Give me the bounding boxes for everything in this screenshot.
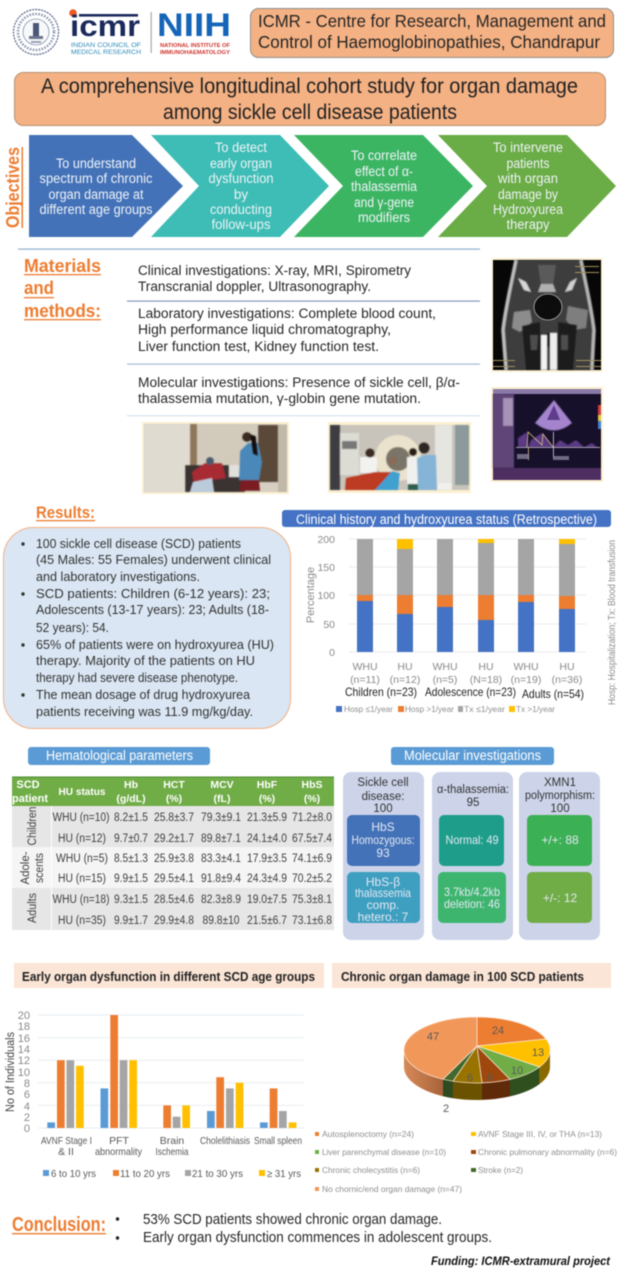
chart legend: Hosp ≤1/year bbox=[344, 704, 393, 714]
table rows: HU (n=35) bbox=[58, 915, 106, 927]
table header: SCD bbox=[16, 779, 40, 791]
pie value labels: 47 bbox=[427, 1031, 439, 1043]
bullet list bbox=[21, 536, 274, 719]
box: HbS homozygous bbox=[347, 815, 420, 866]
chart legend: ≥ 31 yrs bbox=[267, 1168, 301, 1180]
text block: laboratory investigations: High performance liquid chromatography, bbox=[138, 322, 391, 337]
bullet list: The mean dosage of drug hydroxyurea bbox=[36, 687, 251, 702]
heading: early organ dysfunction: Early organ dysfunction in different SCD age groups bbox=[22, 969, 315, 984]
bullet list: and laboratory investigations. bbox=[36, 569, 200, 584]
category labels: abnormality bbox=[95, 1146, 143, 1158]
category labels: & II bbox=[58, 1146, 74, 1158]
chart legend: 11 to 20 yrs bbox=[120, 1168, 170, 1180]
table rows: 21.5±6.7 bbox=[247, 915, 287, 927]
panel: sickle cell disease bbox=[343, 772, 424, 940]
objective arrow 4: damage by bbox=[498, 187, 558, 202]
category labels: HU bbox=[559, 661, 575, 673]
pie value labels: 6 bbox=[467, 1072, 473, 1084]
chart legend bbox=[336, 704, 555, 714]
conclusion text: Early organ dysfunction commences in adolescent groups. bbox=[143, 1229, 492, 1246]
heading: molecular investigations: Molecular investigations bbox=[404, 748, 541, 763]
heading: Materials and methods: Materials bbox=[24, 256, 101, 276]
box: HbS-beta thalassemia: HbS-β bbox=[366, 875, 400, 889]
panel: sickle cell disease: Sickle cell bbox=[357, 777, 409, 789]
image: MRI scan bbox=[492, 258, 602, 372]
category labels: HU bbox=[478, 661, 494, 673]
table rows: 9.7±0.7 bbox=[114, 833, 148, 845]
category labels: (n=36) bbox=[552, 674, 582, 686]
table rows: WHU (n=10) bbox=[52, 812, 110, 824]
age group labels: Adults (n=54) bbox=[522, 687, 584, 701]
category labels: (n=5) bbox=[433, 674, 457, 686]
table rows: 91.8±9.4 bbox=[201, 873, 242, 885]
text block: laboratory investigations: Laboratory investigations: Complete blood count, bbox=[138, 306, 436, 321]
age group labels: Children (n=23) bbox=[345, 685, 417, 699]
pie legend: Autosplenoctomy (n=24) bbox=[322, 1129, 414, 1139]
title box: A comprehensive longitudinal cohort study for organ damage bbox=[41, 75, 578, 98]
y axis: 4 bbox=[24, 1101, 30, 1113]
table rows: 79.3±9.1 bbox=[201, 812, 241, 824]
box: normal: Normal: 49 bbox=[446, 833, 499, 847]
table rows: 82.3±8.9 bbox=[201, 894, 241, 906]
table rows: 29.5±4.1 bbox=[154, 873, 194, 885]
y axis: 2 bbox=[24, 1112, 30, 1124]
heading: clinical history: Clinical history and hydroxyurea status (Retrospective) bbox=[296, 512, 597, 527]
bullet list: SCD patients: Children (6-12 years): 23; bbox=[36, 586, 270, 601]
box: deletion: 3.7kb/4.2kb bbox=[444, 885, 500, 899]
box: +/- bbox=[527, 872, 592, 923]
table rows: 24.1±4.0 bbox=[247, 833, 287, 845]
objective arrow 4: patients bbox=[506, 156, 550, 171]
y axis: 16 bbox=[18, 1033, 30, 1045]
category labels: Cholelithiasis bbox=[200, 1135, 250, 1147]
heading: chronic organ damage: Chronic organ damage in 100 SCD patients bbox=[341, 969, 584, 984]
row group labels: Adults bbox=[27, 893, 39, 923]
table header: (%) bbox=[166, 793, 182, 805]
table rows: 71.2±8.0 bbox=[292, 812, 332, 824]
category labels bbox=[41, 1135, 302, 1158]
objective arrow 2: by bbox=[234, 187, 248, 202]
logo: ICMR bbox=[69, 9, 141, 56]
text block: clinical investigations: Transcranial doppler, Ultrasonography. bbox=[138, 279, 371, 294]
y axis: 8 bbox=[24, 1078, 30, 1090]
table header: (%) bbox=[304, 793, 320, 805]
table rows: 75.3±8.1 bbox=[292, 894, 332, 906]
header box: centre name bbox=[250, 8, 614, 58]
bars bbox=[47, 1015, 296, 1128]
pie legend: No chornic/end organ damage (n=47) bbox=[322, 1184, 462, 1194]
category labels: AVNF Stage I bbox=[41, 1135, 92, 1147]
panel: alpha thalassemia: 95 bbox=[467, 797, 479, 809]
y axis labels: 50 bbox=[323, 619, 335, 631]
pie top slices bbox=[404, 1017, 550, 1083]
category labels: Ischemia bbox=[156, 1146, 189, 1158]
panel: XMN1 polymorphism: 100 bbox=[550, 803, 570, 815]
stacked bar chart: clinical history bbox=[305, 534, 586, 714]
table rows: 17.9±3.5 bbox=[247, 853, 287, 865]
box: +/+: +/+: 88 bbox=[541, 833, 579, 847]
panel: alpha thalassemia: α-thalassemia: bbox=[437, 784, 509, 796]
table rows bbox=[52, 812, 333, 927]
box: HbS-beta thalassemia bbox=[347, 872, 420, 924]
text block: molecular investigations bbox=[138, 375, 460, 406]
pie sides bbox=[404, 1050, 550, 1100]
heading: Materials and methods: and bbox=[24, 278, 54, 298]
category labels: (N=18) bbox=[470, 674, 502, 686]
funding note: Funding: ICMR-extramural project bbox=[431, 1256, 611, 1268]
bullet list: (45 Males: 55 Females) underwent clinical bbox=[36, 552, 271, 567]
objective arrow 4: To intervene bbox=[493, 140, 563, 155]
chart legend: Tx ≤1/year bbox=[464, 704, 505, 714]
chart legend: Hosp >1/year bbox=[405, 704, 454, 714]
panel: XMN1 polymorphism bbox=[519, 772, 600, 940]
objective arrow 3: and γ-gene bbox=[354, 195, 414, 210]
table rows: 9.9±1.7 bbox=[114, 915, 148, 927]
objective arrow 3: effect of α- bbox=[355, 164, 413, 179]
box: normal bbox=[439, 815, 504, 866]
header box: centre name: Control of Haemoglobinopathies, Chandrapur bbox=[258, 32, 600, 52]
table header: HU status bbox=[58, 786, 106, 798]
panel: results summary bbox=[4, 528, 290, 728]
table: hematological parameters bbox=[12, 776, 334, 930]
objective arrow 1 bbox=[29, 135, 183, 237]
text block: laboratory investigations bbox=[138, 306, 436, 354]
pie value labels: 2 bbox=[443, 1103, 449, 1115]
bullet list: 52 years): 54. bbox=[36, 620, 109, 635]
table rows: 29.9±4.8 bbox=[154, 915, 194, 927]
table rows: 8.2±1.5 bbox=[114, 812, 148, 824]
chart legend bbox=[43, 1168, 301, 1180]
table rows: 28.5±4.6 bbox=[154, 894, 194, 906]
bars bbox=[357, 539, 575, 652]
table rows: 74.1±6.9 bbox=[292, 853, 332, 865]
objective arrow 4: with organ bbox=[497, 171, 558, 186]
box: HbS homozygous: HbS bbox=[371, 820, 395, 834]
objective arrow 2: dysfunction bbox=[208, 171, 274, 186]
logo: ICMR: icmr bbox=[70, 10, 140, 43]
pie value labels bbox=[427, 1025, 544, 1115]
objective arrow 2: To detect bbox=[215, 140, 267, 155]
objective arrow 3: thalassemia bbox=[351, 179, 417, 194]
conclusion text bbox=[116, 1211, 492, 1246]
age group labels: Adolescence (n=23) bbox=[425, 685, 516, 699]
table rows: WHU (n=5) bbox=[56, 853, 108, 865]
table rows: WHU (n=18) bbox=[52, 894, 110, 906]
logo: NIIH: NATIONAL INSTITUTE OF bbox=[160, 43, 230, 49]
objective arrow 2 bbox=[151, 135, 329, 237]
category labels: Brain bbox=[160, 1135, 184, 1147]
age group labels bbox=[345, 685, 584, 701]
table header: (g/dL) bbox=[116, 793, 146, 805]
y axis: 10 bbox=[18, 1067, 30, 1079]
objective arrow 2: follow-ups bbox=[212, 217, 271, 232]
category labels: WHU bbox=[432, 661, 458, 673]
pie legend: Liver parenchymal disease (n=10) bbox=[322, 1147, 446, 1157]
box: HbS homozygous: 93 bbox=[376, 846, 390, 860]
bullet list: 100 sickle cell disease (SCD) patients bbox=[36, 536, 241, 551]
table header: Hb bbox=[124, 779, 138, 791]
table rows: 9.9±1.5 bbox=[114, 873, 148, 885]
title box: among sickle cell disease patients bbox=[163, 101, 457, 124]
box: HbS-beta thalassemia: hetero.: 7 bbox=[358, 910, 409, 924]
pie value labels: 6 bbox=[487, 1072, 493, 1084]
box: HbS homozygous: Homozygous: bbox=[352, 833, 414, 847]
image: echo doppler ultrasound bbox=[491, 387, 603, 482]
box: HbS-beta thalassemia: thalassemia bbox=[355, 886, 411, 900]
heading: Objectives: Objectives bbox=[3, 147, 23, 228]
table rows: 19.0±7.5 bbox=[247, 894, 287, 906]
text block: molecular investigations: thalassemia mutation, γ-globin gene mutation. bbox=[138, 391, 421, 406]
bullet list: therapy had severe disease phenotype. bbox=[36, 670, 238, 685]
y axis: 0 bbox=[24, 1123, 30, 1135]
y axis labels: Percentage bbox=[305, 567, 317, 623]
panel: sickle cell disease: disease: bbox=[362, 791, 404, 803]
objective arrow 1: different age groups bbox=[40, 202, 153, 217]
pie value labels: 24 bbox=[492, 1025, 504, 1037]
bullet list: 65% of patients were on hydroxyurea (HU) bbox=[36, 637, 274, 652]
category labels: (n=12) bbox=[390, 674, 420, 686]
pie legend: AVNF Stage III, IV, or THA (n=13) bbox=[478, 1129, 602, 1139]
y axis labels: 0 bbox=[329, 647, 335, 659]
objective arrow 1: spectrum of chronic bbox=[40, 171, 153, 186]
logo: national emblem seal bbox=[14, 10, 58, 54]
chart legend: 6 to 10 yrs bbox=[51, 1168, 96, 1180]
table rows: 70.2±5.2 bbox=[292, 873, 332, 885]
y axis: 14 bbox=[18, 1044, 30, 1056]
logo: NIIH bbox=[151, 7, 231, 56]
objective arrow 1: To understand bbox=[56, 156, 136, 171]
category labels: (n=11) bbox=[350, 674, 380, 686]
title box bbox=[14, 72, 606, 126]
pie chart: chronic organ damage bbox=[404, 1017, 550, 1115]
y axis: 12 bbox=[18, 1055, 30, 1067]
table rows: 67.5±7.4 bbox=[292, 833, 333, 845]
box: +/-: +/-: 12 bbox=[543, 891, 578, 905]
row group labels bbox=[20, 806, 46, 923]
heading: hematological parameters: Hematological parameters bbox=[46, 748, 193, 763]
logo: NIIH: NIIH bbox=[157, 7, 231, 43]
table header: HbF bbox=[257, 779, 278, 791]
text block: molecular investigations: Molecular investigations: Presence of sickle cell, β/α- bbox=[138, 375, 460, 390]
bullet list: patients receiving was 11.9 mg/kg/day. bbox=[36, 704, 253, 719]
table header: patient bbox=[12, 793, 48, 805]
note: abbreviations: Hosp: Hospitalization; Tx: Blood transfusion bbox=[606, 540, 618, 705]
heading: Materials and methods: methods: bbox=[24, 301, 101, 321]
category labels: Small spleen bbox=[254, 1135, 302, 1147]
bullet list: Adolescents (13-17 years): 23; Adults (18- bbox=[36, 602, 269, 617]
heading: chronic organ damage bbox=[332, 963, 611, 988]
category labels: HU bbox=[397, 661, 413, 673]
logo: ICMR: MEDICAL RESEARCH bbox=[71, 49, 141, 56]
row group labels: Adole- bbox=[20, 851, 32, 884]
table rows: 89.8±7.1 bbox=[201, 833, 241, 845]
y axis: No of Individuals bbox=[5, 1032, 17, 1112]
image: MRI scanner room photo bbox=[328, 422, 471, 493]
y axis: 18 bbox=[18, 1021, 30, 1033]
pie legend: Chronic pulmonary abnormality (n=6) bbox=[478, 1147, 617, 1157]
heading: Results: Results: bbox=[36, 503, 95, 522]
chart legend: 21 to 30 yrs bbox=[192, 1168, 243, 1180]
box: deletion: deletion: 46 bbox=[444, 897, 500, 911]
table rows: 9.3±1.5 bbox=[114, 894, 148, 906]
pie legend: Stroke (n=2) bbox=[478, 1165, 523, 1175]
pie legend: Chronic cholecystitis (n=6) bbox=[322, 1165, 420, 1175]
bullet list: therapy. Majority of the patients on HU bbox=[36, 653, 255, 668]
table header: MCV bbox=[210, 779, 234, 791]
box: HbS-beta thalassemia: comp. bbox=[367, 898, 399, 912]
y axis bbox=[5, 1010, 30, 1135]
table rows: HU (n=12) bbox=[58, 833, 106, 845]
table header bbox=[12, 779, 322, 805]
table rows: 89.8±10 bbox=[202, 915, 240, 927]
pie legend bbox=[315, 1129, 617, 1194]
objective arrow 3: modifiers bbox=[358, 210, 410, 225]
category labels: PFT bbox=[109, 1135, 129, 1147]
objective arrow 3: To correlate bbox=[351, 148, 417, 163]
table rows: 73.1±6.8 bbox=[292, 915, 332, 927]
category labels bbox=[350, 661, 582, 686]
text block: laboratory investigations: Liver function test, Kidney function test. bbox=[138, 339, 379, 354]
table rows: 25.9±3.8 bbox=[154, 853, 194, 865]
logo: ICMR: INDIAN COUNCIL OF bbox=[71, 42, 141, 49]
category labels: (n=19) bbox=[511, 674, 541, 686]
y axis labels: 100 bbox=[317, 590, 335, 602]
header box: centre name: ICMR - Centre for Research, Management and bbox=[258, 11, 606, 31]
objective arrow 4 bbox=[438, 135, 616, 237]
panel: sickle cell disease: 100 bbox=[373, 803, 393, 815]
pie value labels: 13 bbox=[532, 1047, 544, 1059]
y axis labels: 200 bbox=[317, 534, 335, 546]
conclusion text: 53% SCD patients showed chronic organ damage. bbox=[143, 1211, 442, 1228]
table rows: HU (n=15) bbox=[58, 873, 106, 885]
box: deletion bbox=[438, 872, 506, 923]
objective arrow 4: therapy bbox=[506, 217, 550, 232]
y axis labels: 150 bbox=[317, 562, 335, 574]
category labels: WHU bbox=[352, 661, 378, 673]
heading: Conclusion: Conclusion: bbox=[12, 1214, 106, 1236]
objective arrow 1: organ damage at bbox=[48, 187, 144, 202]
pie value labels: 10 bbox=[511, 1065, 523, 1077]
table rows: 24.3±4.9 bbox=[247, 873, 287, 885]
table rows: 29.2±1.7 bbox=[154, 833, 194, 845]
table header: (%) bbox=[259, 793, 275, 805]
table rows: 83.3±4.1 bbox=[201, 853, 241, 865]
category labels: WHU bbox=[513, 661, 539, 673]
table header: HbS bbox=[302, 779, 322, 791]
y axis: 20 bbox=[18, 1010, 30, 1022]
y axis labels bbox=[305, 534, 335, 659]
panel: XMN1 polymorphism: polymorphism: bbox=[525, 790, 595, 802]
row group labels: scents bbox=[34, 853, 46, 883]
table rows: 8.5±1.3 bbox=[114, 853, 148, 865]
panel: XMN1 polymorphism: XMN1 bbox=[544, 777, 576, 789]
image: spirometry test photo bbox=[142, 422, 289, 494]
objective arrow 3 bbox=[294, 135, 473, 237]
text block: clinical investigations bbox=[138, 263, 411, 294]
bar chart: early organ dysfunction bbox=[5, 1010, 304, 1180]
table header: HCT bbox=[163, 779, 185, 791]
text block: clinical investigations: Clinical investigations: X-ray, MRI, Spirometry bbox=[138, 263, 411, 278]
objective arrow 4: Hydroxyurea bbox=[493, 202, 563, 217]
box: +/+ bbox=[527, 815, 592, 866]
heading: Materials and methods bbox=[24, 256, 101, 321]
row group labels: Children bbox=[27, 806, 39, 846]
objective arrow 2: early organ bbox=[210, 156, 272, 171]
panel: alpha thalassemia bbox=[432, 772, 513, 940]
y axis: 6 bbox=[24, 1089, 30, 1101]
table rows: 25.8±3.7 bbox=[154, 812, 194, 824]
table header: (fL) bbox=[214, 793, 230, 805]
table rows: 21.3±5.9 bbox=[247, 812, 287, 824]
objective arrow 2: conducting bbox=[210, 202, 272, 217]
chart legend: Tx >1/year bbox=[516, 704, 555, 714]
heading: early organ dysfunction bbox=[14, 963, 324, 988]
logo: NIIH: IMMUNOHAEMATOLOGY bbox=[160, 50, 230, 56]
